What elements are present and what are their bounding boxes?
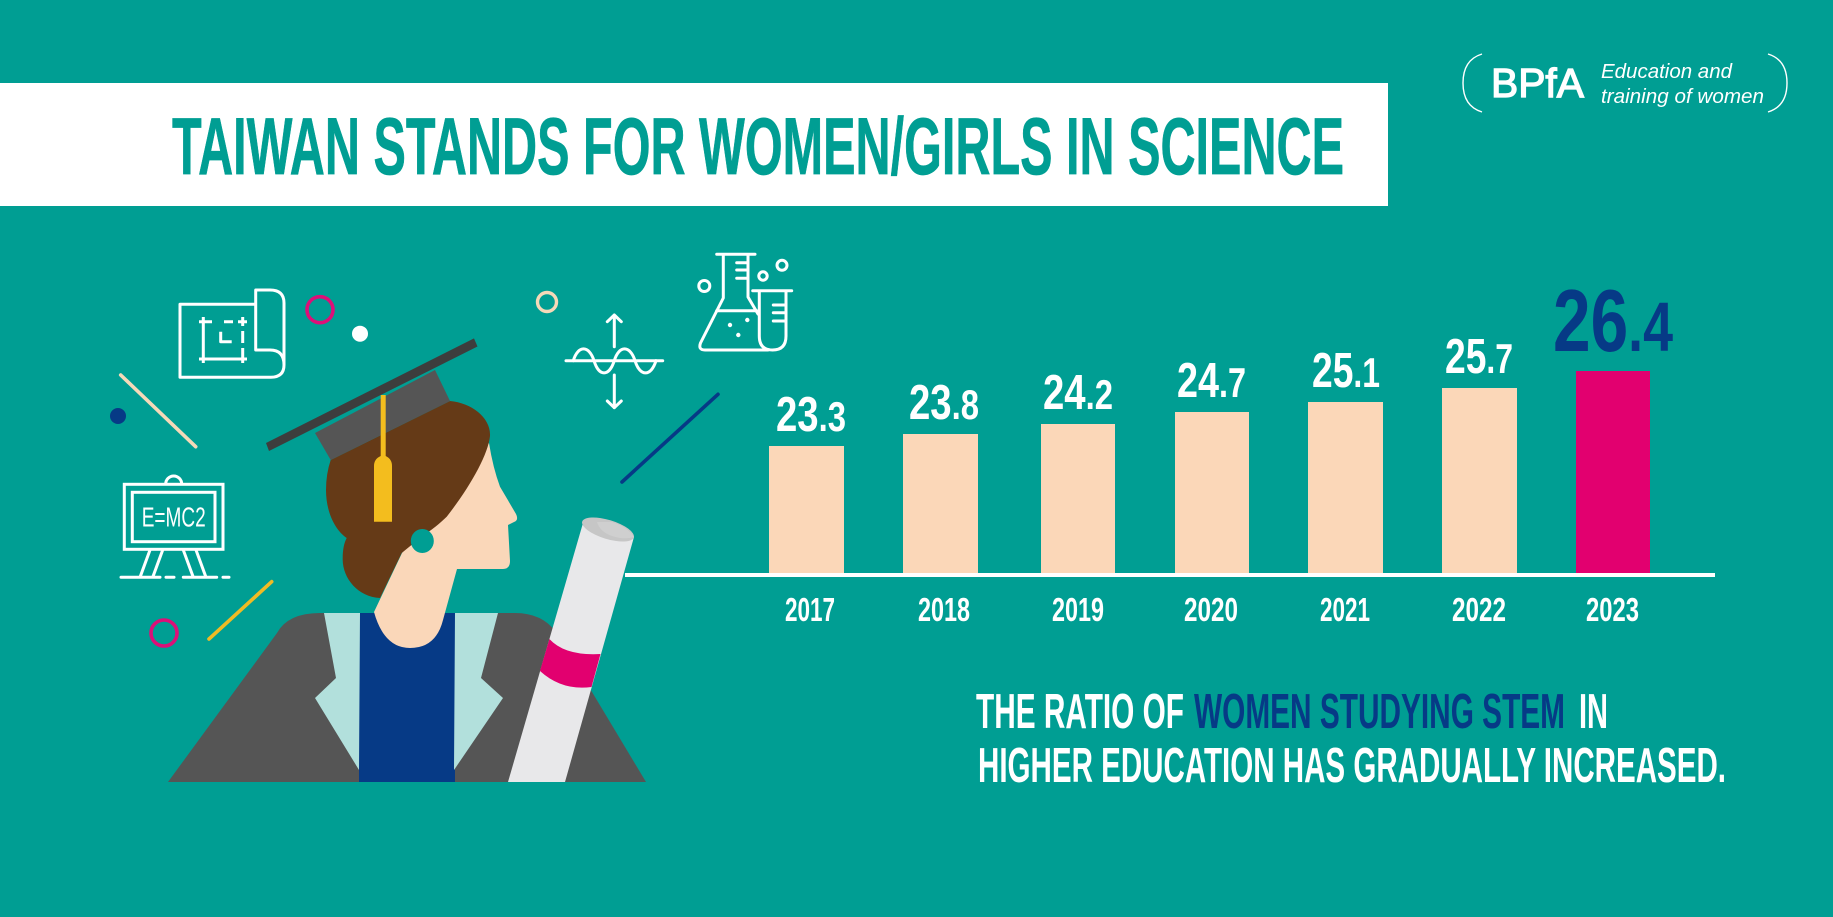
value labels [776, 330, 1513, 442]
cap base [315, 370, 450, 460]
logo: BPfA Education and training of women [1463, 54, 1787, 112]
year labels [785, 591, 1639, 628]
tassel [374, 395, 392, 522]
bar 2018 [903, 434, 978, 573]
bar chart [769, 271, 1673, 628]
logo: BPfA Education and training of women: BPfA [1491, 60, 1585, 106]
hair [326, 401, 490, 598]
icon: flask and test tube [699, 254, 792, 350]
year labels: 2019 [1052, 591, 1104, 628]
caption text: THE RATIO OF [976, 685, 1184, 739]
caption text [976, 685, 1726, 793]
year labels: 2020 [1184, 591, 1238, 628]
value labels: 25.7 [1445, 330, 1513, 384]
caption text: WOMEN STUDYING STEM [1194, 685, 1565, 739]
earring [411, 529, 434, 553]
year labels: 2017 [785, 591, 835, 628]
left lapel [315, 613, 360, 770]
bar 2023 [1576, 371, 1650, 573]
icon: blackboard E=MC2 [121, 476, 229, 577]
logo: BPfA Education and training of women: training of women [1601, 86, 1764, 108]
year labels: 2023 [1586, 591, 1639, 628]
year labels: 2018 [918, 591, 970, 628]
value labels: 24.2 [1043, 366, 1113, 420]
icon: blueprint [180, 290, 284, 377]
value labels: 25.1 [1312, 344, 1380, 398]
value labels: 23.8 [909, 376, 979, 430]
bar 2017 [769, 446, 844, 573]
illustration: graduate woman [168, 338, 646, 782]
icon: blackboard E=MC2: E=MC2 [142, 502, 206, 533]
highlighted value 2023: 26.4 [1553, 271, 1673, 370]
blue top [359, 613, 455, 782]
bar 2020 [1175, 412, 1249, 573]
face and neck [374, 443, 517, 648]
logo: BPfA Education and training of women: Education and [1601, 61, 1733, 83]
icon: wave with arrows [566, 315, 663, 408]
year labels: 2022 [1452, 591, 1506, 628]
year labels: 2021 [1320, 591, 1370, 628]
caption text: IN [1579, 685, 1608, 739]
value labels: 23.3 [776, 388, 846, 442]
illustration: diploma [508, 513, 637, 782]
value labels: 24.7 [1177, 354, 1246, 408]
bar 2022 [1442, 388, 1517, 573]
bar 2019 [1041, 424, 1115, 573]
title banner [0, 83, 1388, 206]
bar 2021 [1308, 402, 1383, 573]
axis line [625, 573, 1715, 577]
gown [168, 613, 646, 782]
decorative dots, rings and lines [110, 292, 718, 646]
cap board [266, 338, 478, 451]
right lapel [454, 613, 503, 770]
